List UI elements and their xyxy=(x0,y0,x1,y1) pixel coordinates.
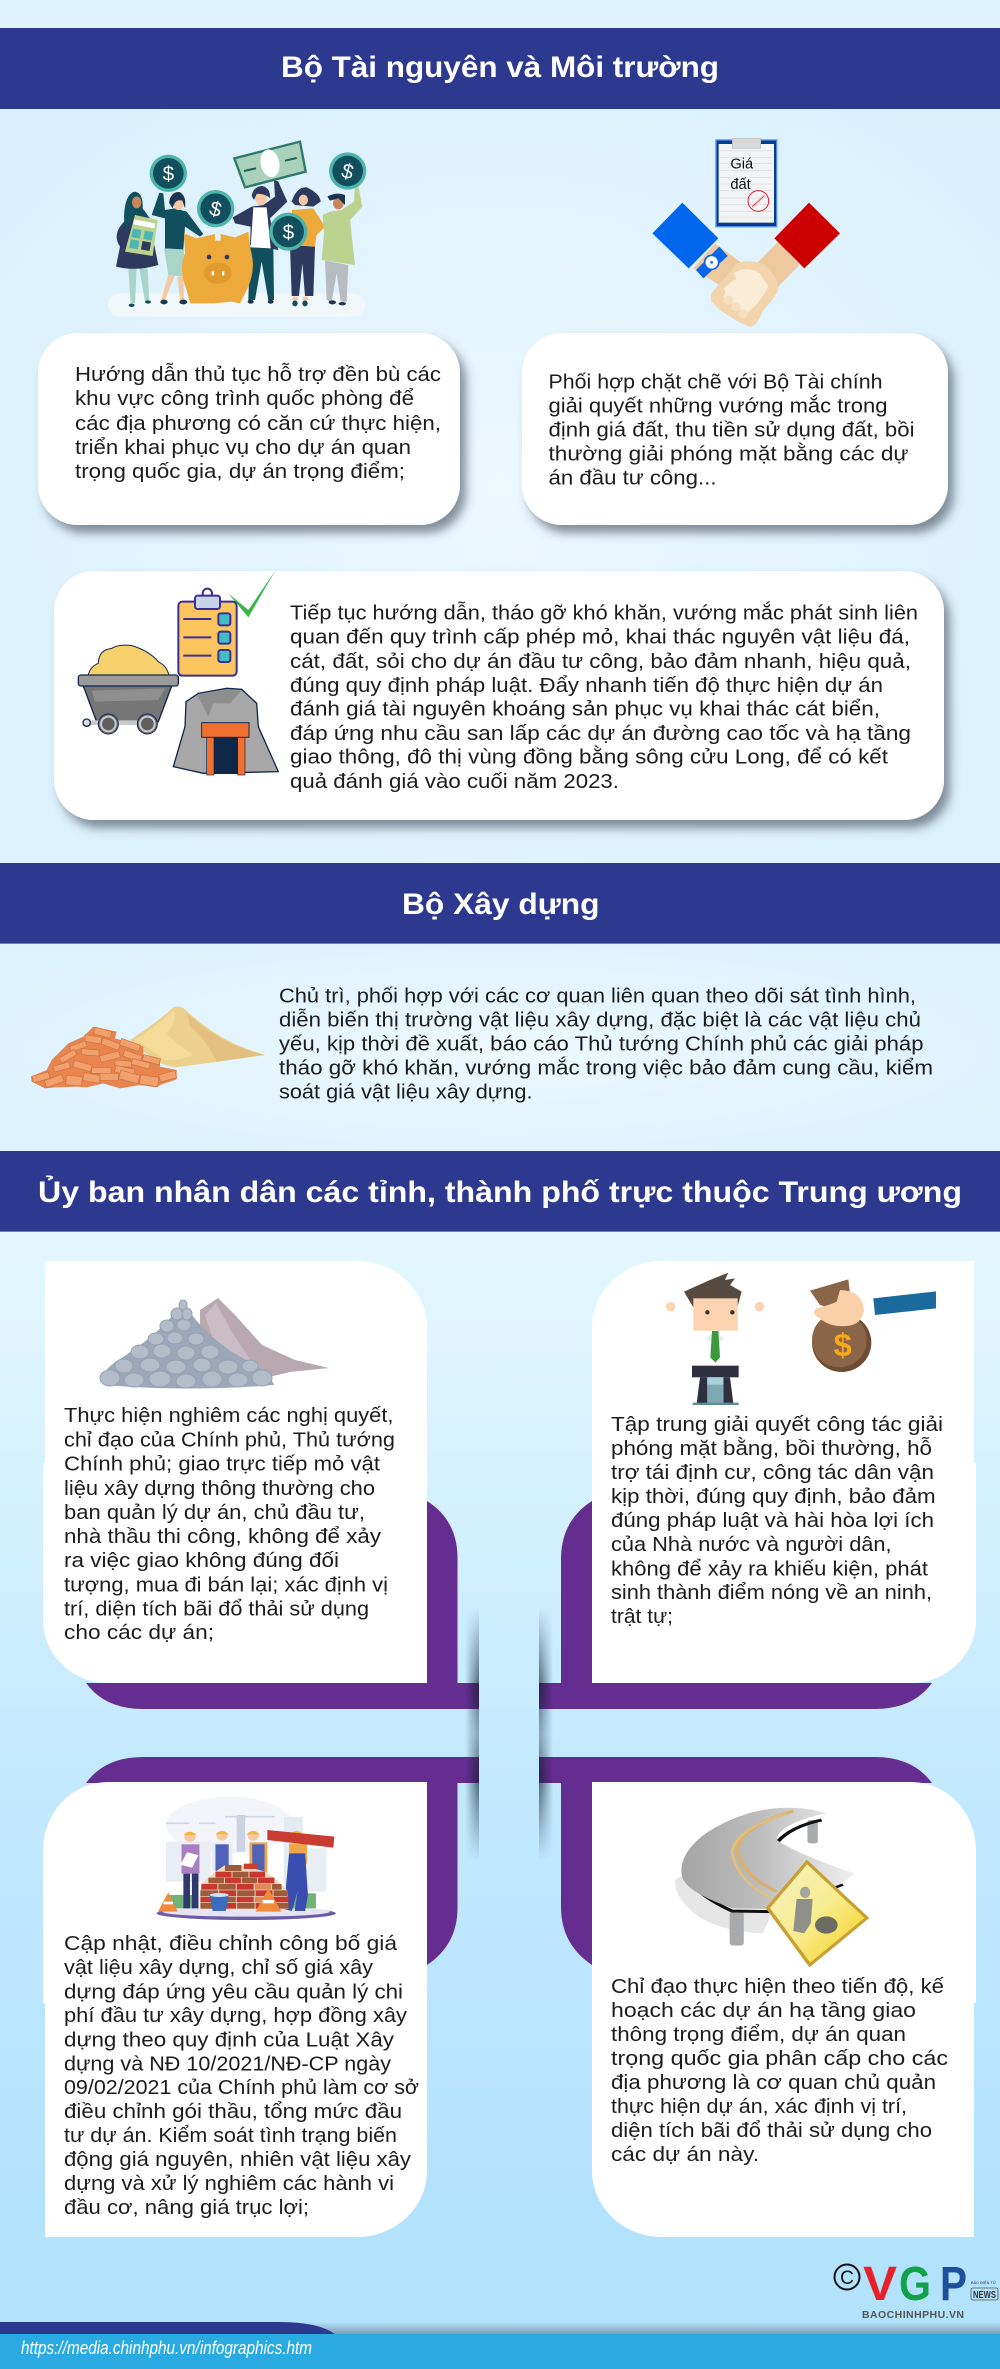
text: land price coordination: Phối hợp chặt chẽ với Bộ Tài chính xyxy=(548,370,882,394)
icon: people with money and piggy bank xyxy=(108,142,366,317)
purple connector frame xyxy=(86,1501,932,1965)
text: compensation guidance xyxy=(75,363,441,483)
text: update material prices xyxy=(64,1932,419,2219)
text: direct implementation of resolutions: ra việc giao không đúng đối xyxy=(64,1549,339,1572)
icon: construction workers laying bricks xyxy=(157,1797,336,1920)
text: update material prices: tư dự án. Kiểm soát tình trạng biến xyxy=(64,2124,397,2147)
logo: VGP News: V xyxy=(863,2258,897,2311)
text: site clearance: Tập trung giải quyết công tác giải xyxy=(611,1413,943,1436)
icon: official at podium and money bag bribe: $ xyxy=(834,1326,852,1363)
text: update material prices: dựng và NĐ 10/2021/NĐ-CP ngày xyxy=(64,2052,392,2076)
text: infrastructure projects: hoạch các dự án hạ tầng giao xyxy=(611,1999,916,2022)
text: construction ministry duties: yếu, kịp thời đề xuất, báo cáo Thủ tướng Chính phủ các giải pháp xyxy=(279,1033,924,1056)
text: direct implementation of resolutions: chỉ đạo của Chính phủ, Thủ tướng xyxy=(64,1429,395,1452)
panel: compensation guidance xyxy=(38,333,460,525)
text: mining materials: đúng quy định pháp luật. Đẩy nhanh tiến độ thực hiện dự án xyxy=(290,674,883,697)
text: infrastructure projects: trọng quốc gia phân cấp cho các xyxy=(611,2047,948,2070)
icon: people with money and piggy bank: $ xyxy=(207,197,224,222)
logo: VGP News xyxy=(834,2258,998,2321)
section header: Bộ Xây dựng: Bộ Xây dựng xyxy=(402,888,600,921)
text: direct implementation of resolutions: ban quản lý dự án, chủ đầu tư, xyxy=(64,1501,365,1524)
text: update material prices: phí đầu tư xây dựng, hợp đồng xây xyxy=(64,2004,408,2027)
text: land price coordination: giải quyết những vướng mắc trong xyxy=(548,394,888,418)
text: infrastructure projects: các dự án này. xyxy=(611,2143,759,2166)
logo: VGP News: BAOCHINHPHU.VN xyxy=(862,2309,964,2321)
text: site clearance: sinh thành điểm nóng về an ninh, xyxy=(611,1581,932,1604)
text: construction ministry duties: soát giá vật liệu xây dựng. xyxy=(279,1080,532,1103)
text: compensation guidance: trọng quốc gia, dự án trọng điểm; xyxy=(75,460,405,483)
text: infrastructure projects: thông trọng điểm, dự án quan xyxy=(611,2023,906,2046)
text: mining materials: giao thông, đô thị vùng đồng bằng sông cửu Long, để có kết xyxy=(290,746,888,769)
text: direct implementation of resolutions: Chính phủ; giao trực tiếp mỏ vật xyxy=(64,1453,380,1476)
text: mining materials: quan đến quy trình cấp phép mỏ, khai thác nguyên vật liệu đá, xyxy=(290,626,910,649)
text: site clearance: phóng mặt bằng, bồi thường, hỗ xyxy=(611,1437,932,1460)
icon: handshake with land price clipboard: Giá xyxy=(730,156,754,172)
logo: VGP News: BÁO ĐIỆN TỬ xyxy=(971,2280,997,2285)
panel: mining materials xyxy=(54,570,944,820)
text: mining materials: quả đánh giá vào cuối năm 2023. xyxy=(290,770,619,793)
text: compensation guidance: Hướng dẫn thủ tục hỗ trợ đền bù các xyxy=(75,363,441,386)
logo: VGP News: P xyxy=(940,2258,967,2311)
text: direct implementation of resolutions: cho các dự án; xyxy=(64,1621,214,1644)
text: update material prices: dựng theo quy định của Luật Xây xyxy=(64,2028,395,2052)
text: infrastructure projects: địa phương là cơ quan chủ quản xyxy=(611,2071,936,2094)
section header: Bộ Tài nguyên và Môi trường xyxy=(0,28,1000,109)
text: land price coordination: thường giải phóng mặt bằng các dự xyxy=(548,443,909,466)
text: infrastructure projects: diện tích bãi đổ thải sử dụng cho xyxy=(611,2119,932,2142)
section header: Ủy ban nhân dân xyxy=(0,1151,1000,1232)
text: land price coordination xyxy=(548,370,914,490)
panel: land price coordination xyxy=(522,333,948,525)
text: mining materials: đánh giá tài nguyên khoáng sản phục vụ khai thác cát biển, xyxy=(290,698,880,720)
text: land price coordination: định giá đất, thu tiền sử dụng đất, bồi xyxy=(548,418,914,442)
text: site clearance: đúng pháp luật và hài hòa lợi ích xyxy=(611,1509,934,1532)
text: site clearance: trật tự; xyxy=(611,1605,673,1628)
panel: direct implementation of resolutions xyxy=(43,1261,427,1683)
logo: VGP News: G xyxy=(899,2258,931,2311)
text: update material prices: dựng và xử lý nghiêm các hành vi xyxy=(64,2172,394,2195)
text: site clearance xyxy=(611,1413,943,1628)
icon: road section with work sign xyxy=(675,1808,867,1965)
icon: handshake with land price clipboard xyxy=(652,138,840,327)
text: site clearance: không để xảy ra khiếu kiện, phát xyxy=(611,1558,928,1581)
panel: infrastructure projects xyxy=(592,1782,976,2237)
section header: Bộ Xây dựng xyxy=(0,863,1000,944)
icon: mine cart, checklist and tunnel xyxy=(78,570,278,775)
text: infrastructure projects xyxy=(611,1975,948,2166)
text: direct implementation of resolutions: Thực hiện nghiêm các nghị quyết, xyxy=(64,1404,394,1427)
text: construction ministry duties: tháo gỡ khó khăn, vướng mắc trong việc bảo đảm cung cầu, kiểm xyxy=(279,1057,933,1080)
text: direct implementation of resolutions: liệu xây dựng thông thường cho xyxy=(64,1477,375,1500)
text: direct implementation of resolutions: trí, diện tích bãi đổ thải sử dụng xyxy=(64,1598,369,1621)
footer bar with URL xyxy=(0,2322,1000,2369)
worker figures xyxy=(181,1831,308,1911)
text: mining materials xyxy=(290,602,918,793)
icon: bricks and sand pile xyxy=(31,1007,265,1088)
panel: update material prices xyxy=(43,1782,427,2237)
text: update material prices: Cập nhật, điều chỉnh công bố giá xyxy=(64,1932,398,1955)
central column with shadows xyxy=(466,1612,552,1856)
text: direct implementation of resolutions xyxy=(64,1404,395,1644)
text: update material prices: 09/02/2021 của Chính phủ làm cơ sở xyxy=(64,2076,419,2099)
icon: stone pile and rock mountain xyxy=(100,1298,329,1388)
text: direct implementation of resolutions: nhà thầu thi công, không để xảy xyxy=(64,1525,382,1548)
text: mining materials: cát, đất, sỏi cho dự án đầu tư công, bảo đảm nhanh, hiệu quả, xyxy=(290,650,911,673)
panel: site clearance xyxy=(592,1261,976,1683)
text: construction ministry duties xyxy=(279,984,933,1103)
text: direct implementation of resolutions: tượng, mua đi bán lại; xác định vị xyxy=(64,1574,388,1597)
text: construction ministry duties: Chủ trì, phối hợp với các cơ quan liên quan theo dõi sát tình hình, xyxy=(279,984,916,1007)
text: update material prices: vật liệu xây dựng, chỉ số giá xây xyxy=(64,1956,374,1979)
text: site clearance: trợ tái định cư, công tác dân vận xyxy=(611,1461,934,1484)
text: mining materials: Tiếp tục hướng dẫn, tháo gỡ khó khăn, vướng mắc phát sinh liên xyxy=(290,602,918,625)
icon: handshake with land price clipboard: đất xyxy=(730,177,751,193)
icon: people with money and piggy bank: $ xyxy=(163,163,175,186)
text: construction ministry duties: diễn biến thị trường vật liệu xây dựng, đặc biệt là các vật liệu chủ xyxy=(279,1008,921,1032)
text: infrastructure projects: thực hiện dự án, xác định vị trí, xyxy=(611,2095,907,2118)
text: update material prices: dựng đáp ứng yêu cầu quản lý chi xyxy=(64,1981,403,2004)
text: update material prices: động giá nguyên, nhiên vật liệu xây xyxy=(64,2148,412,2171)
text: mining materials: đáp ứng nhu cầu san lấp các dự án đường cao tốc và hạ tầng xyxy=(290,722,911,745)
text: land price coordination: án đầu tư công... xyxy=(548,467,716,490)
text: update material prices: điều chỉnh gói thầu, tổng mức đầu xyxy=(64,2100,402,2123)
icon: people with money and piggy bank: $ xyxy=(339,159,356,185)
footer bar with URL: https://media.chinhphu.vn/infographics.htm xyxy=(21,2338,312,2358)
icon: people with money and piggy bank: $ xyxy=(283,221,295,244)
text: compensation guidance: triển khai phục vụ cho dự án quan xyxy=(75,436,411,459)
icon: official at podium and money bag bribe xyxy=(666,1273,936,1405)
text: infrastructure projects: Chỉ đạo thực hiện theo tiến độ, kế xyxy=(611,1975,945,1998)
section header: Ủy ban nhân dân: Ủy ban nhân dân các tỉnh, thành phố trực thuộc Trung ương xyxy=(38,1175,962,1209)
text: site clearance: của Nhà nước và người dân, xyxy=(611,1533,892,1556)
logo: VGP News: C xyxy=(840,2268,854,2289)
text: compensation guidance: khu vực công trình quốc phòng để xyxy=(75,387,414,410)
text: compensation guidance: các địa phương có căn cứ thực hiện, xyxy=(75,412,441,435)
section header: Bộ Tài nguyên và Môi trường: Bộ Tài nguyên và Môi trường xyxy=(281,51,719,84)
text: site clearance: kịp thời, đúng quy định, bảo đảm xyxy=(611,1485,936,1508)
brick wall xyxy=(200,1865,289,1909)
text: update material prices: đầu cơ, nâng giá trục lợi; xyxy=(64,2196,309,2219)
